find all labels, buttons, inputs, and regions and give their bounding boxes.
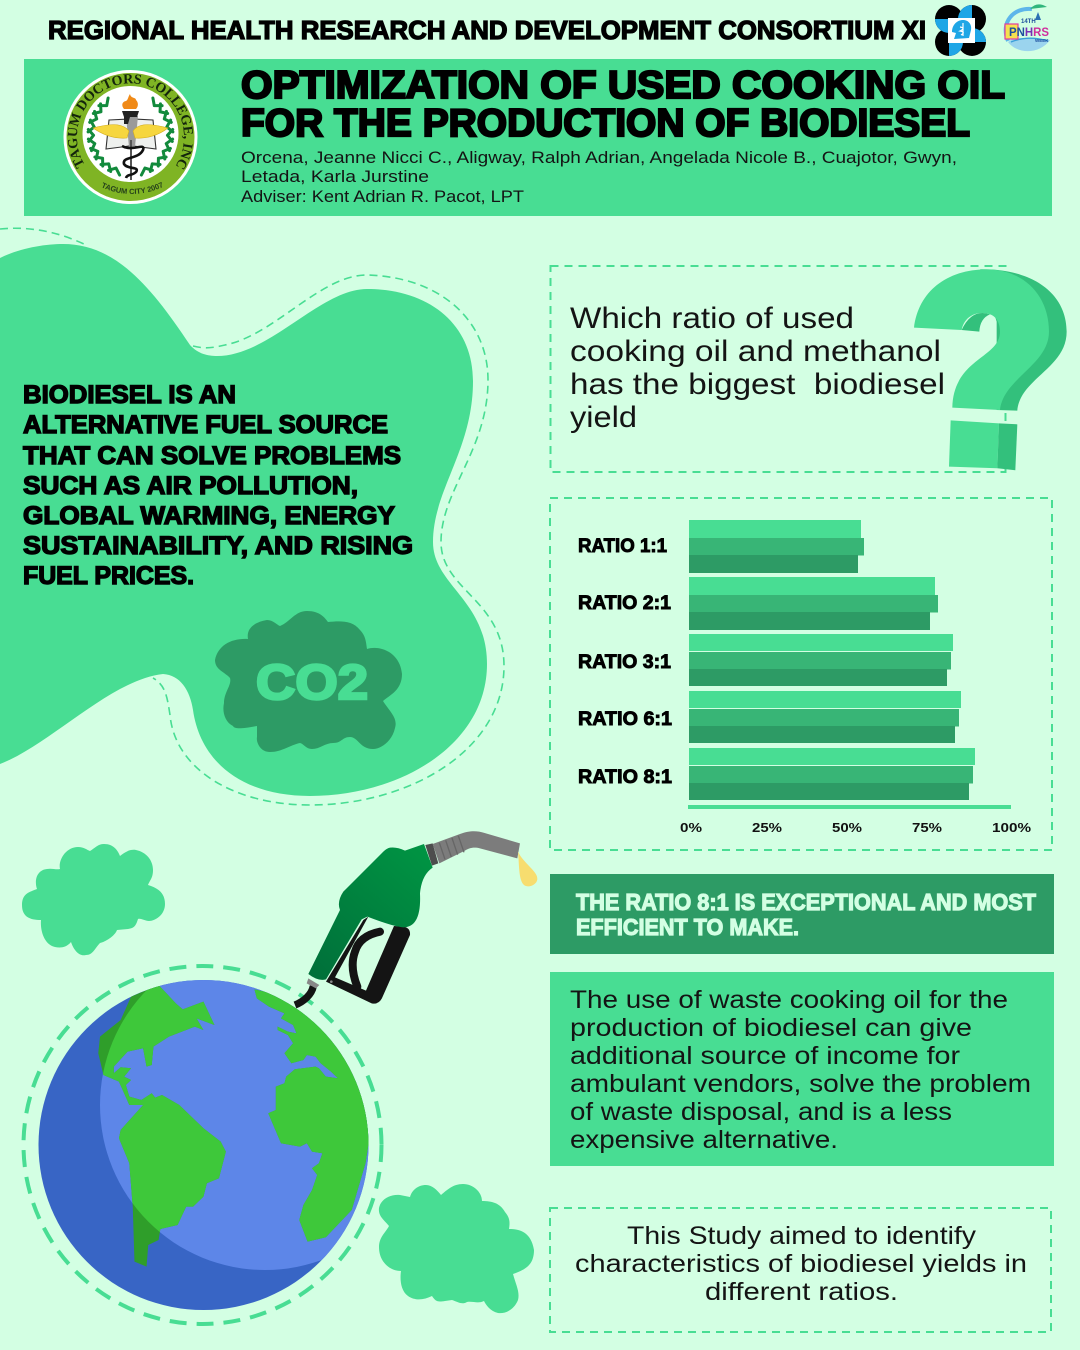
panel: study aim: This Study aimed to identify xyxy=(627,1222,977,1250)
authors and adviser xyxy=(241,148,957,206)
panel: benefits paragraph xyxy=(550,972,1054,1166)
panel: conclusion banner: EFFICIENT TO MAKE. xyxy=(576,914,799,940)
ratio 8:1 bars: RATIO 8:1 xyxy=(578,766,672,788)
icon: question mark xyxy=(914,269,1067,470)
icon: 14th PNHRS week logo: WEEK xyxy=(1035,38,1049,43)
ratio 1:1 bars: RATIO 1:1 xyxy=(578,535,667,557)
icon: fuel pump nozzle xyxy=(295,831,537,1005)
biodiesel statement: GLOBAL WARMING, ENERGY xyxy=(23,502,395,530)
icon: Tagum Doctors College seal xyxy=(64,70,198,204)
biodiesel statement: ALTERNATIVE FUEL SOURCE xyxy=(23,411,388,439)
ratio 6:1 bars: RATIO 6:1 xyxy=(578,708,672,730)
panel: conclusion banner xyxy=(550,874,1054,954)
panel: title header xyxy=(24,59,1052,216)
chart axis: 50% xyxy=(832,820,862,835)
ratio 3:1 bars: RATIO 3:1 xyxy=(578,651,671,673)
consortium heading: REGIONAL HEALTH RESEARCH AND DEVELOPMENT CONSORTIUM XI xyxy=(48,17,926,45)
biodiesel statement: SUCH AS AIR POLLUTION, xyxy=(23,472,358,500)
authors and adviser: Letada, Karla Jurstine xyxy=(241,167,429,186)
icon: Tagum Doctors College seal: TAGUM CITY 2007 xyxy=(102,182,162,194)
chart axis xyxy=(680,805,1032,835)
chart axis: 75% xyxy=(912,820,942,835)
panel: bar chart of ratios xyxy=(550,498,1052,850)
decorative cloud: right xyxy=(379,1184,534,1313)
panel: study aim xyxy=(550,1208,1051,1332)
torch xyxy=(126,116,138,147)
icon: CO2 cloud xyxy=(215,611,402,752)
panel: benefits paragraph: production of biodiesel can give xyxy=(570,1014,972,1042)
panel: study aim: different ratios. xyxy=(705,1278,898,1306)
chart axis: 0% xyxy=(680,820,703,835)
title text: OPTIMIZATION OF USED COOKING OIL xyxy=(241,64,1005,107)
panel: biodiesel blob xyxy=(0,228,504,805)
question text: yield xyxy=(570,401,637,434)
question text: has the biggest biodiesel xyxy=(570,368,945,401)
icon: DOST logo xyxy=(935,5,986,56)
icon: 14th PNHRS week logo: PNHRS xyxy=(1009,27,1049,39)
title text: FOR THE PRODUCTION OF BIODIESEL xyxy=(241,102,970,145)
title text xyxy=(241,64,1005,145)
book xyxy=(106,119,156,149)
panel: benefits paragraph: additional source of income for xyxy=(570,1042,960,1070)
icon: 14th PNHRS week logo: 14TH xyxy=(1021,19,1036,25)
ratio 8:1 bars xyxy=(578,748,975,800)
panel: study aim: characteristics of biodiesel yields in xyxy=(575,1250,1027,1278)
chart axis: 25% xyxy=(752,820,782,835)
ratio 3:1 bars xyxy=(578,634,953,686)
ratio 2:1 bars xyxy=(578,577,938,630)
chart axis: 100% xyxy=(992,820,1032,835)
panel: benefits paragraph: of waste disposal, and is a less xyxy=(570,1098,952,1126)
globe illustration xyxy=(22,964,384,1326)
icon: CO2 cloud: CO2 xyxy=(256,656,368,710)
authors and adviser: Orcena, Jeanne Nicci C., Aligway, Ralph Adrian, Angelada Nicole B., Cuajotor, Gwyn, xyxy=(241,148,957,167)
question text xyxy=(570,302,945,434)
biodiesel statement: SUSTAINABILITY, AND RISING xyxy=(23,532,413,560)
panel: benefits paragraph: The use of waste cooking oil for the xyxy=(570,986,1008,1014)
biodiesel statement: BIODIESEL IS AN xyxy=(23,381,236,409)
biodiesel statement: THAT CAN SOLVE PROBLEMS xyxy=(23,442,401,470)
ratio 1:1 bars xyxy=(578,520,864,573)
wreath xyxy=(88,98,173,175)
staff and serpent xyxy=(130,140,132,180)
question text: cooking oil and methanol xyxy=(570,335,941,368)
decorative cloud: left xyxy=(22,844,165,955)
question text: Which ratio of used xyxy=(570,302,854,335)
ratio 2:1 bars: RATIO 2:1 xyxy=(578,592,671,614)
authors and adviser: Adviser: Kent Adrian R. Pacot, LPT xyxy=(241,187,524,206)
wings xyxy=(93,125,168,138)
panel: benefits paragraph: expensive alternative. xyxy=(570,1126,838,1154)
icon: 14th PNHRS week logo xyxy=(1005,4,1050,51)
ratio 6:1 bars xyxy=(578,691,961,743)
panel: conclusion banner: THE RATIO 8:1 IS EXCEPTIONAL AND MOST xyxy=(576,889,1037,915)
biodiesel statement xyxy=(23,381,413,590)
panel: research question xyxy=(550,266,1067,472)
biodiesel statement: FUEL PRICES. xyxy=(23,562,194,590)
panel: benefits paragraph: ambulant vendors, solve the problem xyxy=(570,1070,1031,1098)
